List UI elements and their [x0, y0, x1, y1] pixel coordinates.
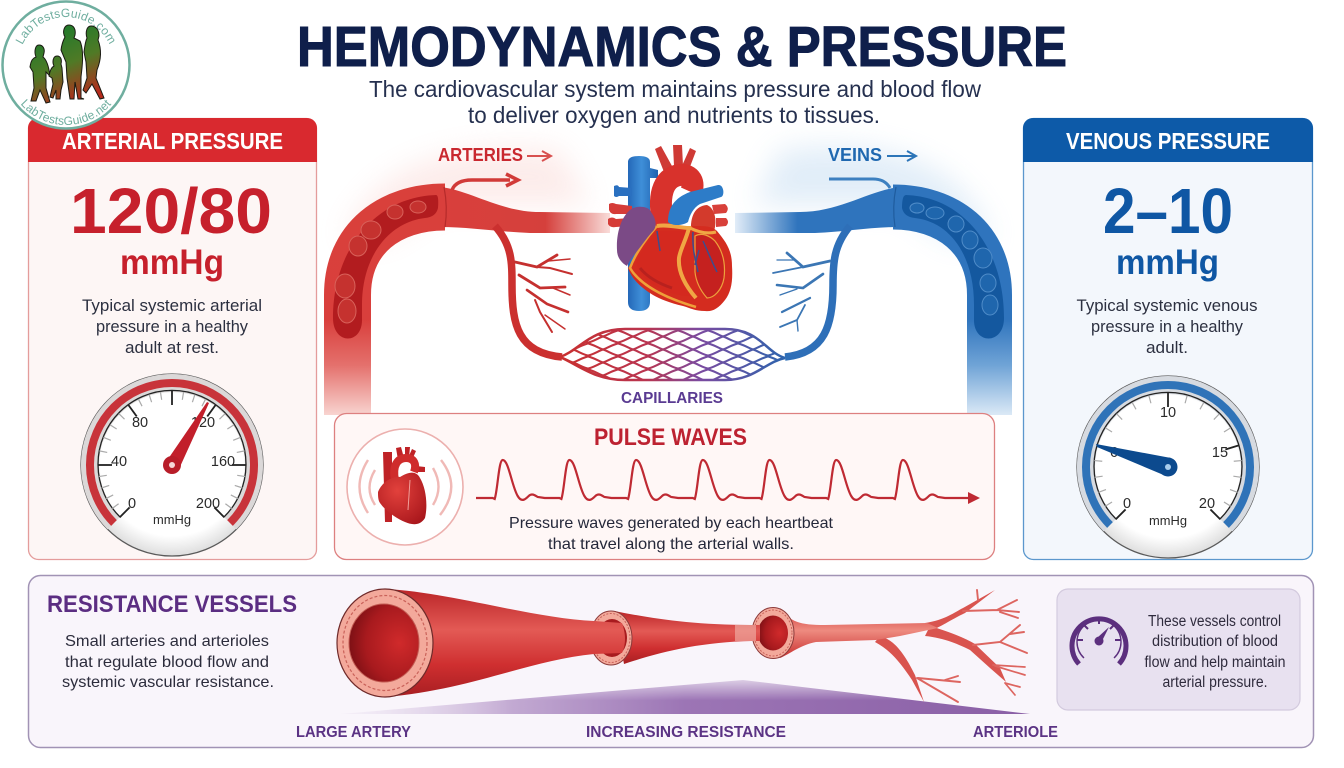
orange fat bands — [657, 225, 696, 298]
label: arteries: ARTERIES — [438, 145, 523, 165]
pulse description — [509, 515, 834, 553]
vein vessel — [735, 187, 1004, 415]
resistance description: that regulate blood flow and — [65, 654, 269, 671]
callout text: flow and help maintain — [1144, 654, 1286, 671]
aortic stubs — [655, 145, 696, 172]
subtitle: The cardiovascular system maintains pressure and blood flow — [369, 76, 981, 102]
artery lumen with blood cells — [333, 195, 438, 339]
venous description — [1076, 296, 1258, 357]
glow: venous side — [755, 147, 991, 240]
vein branch to capillaries — [785, 226, 850, 357]
panel: venous pressure — [1023, 118, 1313, 560]
diagram: circulation — [333, 145, 1004, 415]
pulmonary artery — [668, 185, 723, 225]
large ring — [337, 589, 433, 697]
chart: increasing resistance wedge — [340, 680, 1030, 714]
callout text: These vessels control — [1148, 613, 1281, 630]
label: increasing resistance: INCREASING RESISTANCE — [586, 724, 786, 741]
arteriole primary branches — [875, 590, 1006, 702]
arterial gauge: 120 — [191, 415, 215, 431]
venous gauge: 20 — [1199, 496, 1215, 512]
panel: arterial pressure — [28, 118, 317, 560]
arrow: arterial flow — [452, 174, 518, 190]
resistance description — [62, 633, 274, 691]
venous gauge — [1077, 376, 1259, 558]
arrow: venous flow — [829, 179, 890, 188]
callout text — [1144, 613, 1286, 691]
small ring — [752, 608, 794, 658]
arterial gauge: 200 — [196, 496, 220, 512]
right atrium — [617, 207, 656, 266]
arterial description — [82, 296, 262, 357]
resistance description: Small arteries and arterioles — [65, 633, 269, 650]
pulmonary veins — [608, 203, 632, 227]
icon: pulsing heart — [347, 429, 463, 545]
arterial gauge — [81, 374, 263, 556]
mini heart vessels — [383, 447, 425, 522]
vein lumen with blood cells — [902, 195, 1004, 339]
label: veins: VEINS — [828, 145, 882, 165]
venous header — [1023, 118, 1313, 162]
panel: pulse waves — [334, 414, 994, 560]
heading: resistance vessels: RESISTANCE VESSELS — [47, 591, 297, 618]
glow: arterial side — [345, 148, 590, 240]
venous gauge: 0 — [1123, 496, 1131, 512]
heading: pulse waves: PULSE WAVES — [594, 424, 747, 451]
icon: anatomical heart — [608, 145, 732, 311]
label: veins — [828, 145, 916, 165]
arteriole body — [780, 608, 938, 658]
arteriole twigs — [917, 590, 1027, 702]
logo text top: LabTestsGuide.com — [16, 8, 114, 44]
venous gauge: mmHg — [1149, 513, 1187, 528]
resistance description: systemic vascular resistance. — [62, 674, 274, 691]
right ventricle — [636, 231, 690, 296]
venous header label: VENOUS PRESSURE — [1066, 128, 1270, 154]
illustration: narrowing artery — [337, 589, 1027, 702]
arterial value: 120/80 — [70, 175, 272, 247]
panel: resistance vessels — [28, 576, 1314, 748]
venous value: 2–10 — [1103, 175, 1233, 247]
callout text: distribution of blood — [1152, 633, 1278, 650]
venous description: pressure in a healthy — [1091, 317, 1243, 336]
coronary vessels — [657, 231, 717, 272]
arterial description: adult at rest. — [125, 338, 219, 357]
pulse description: Pressure waves generated by each heartbeat — [509, 515, 834, 532]
venous gauge: 6 — [1110, 445, 1118, 461]
icon: purple gauge — [1072, 618, 1126, 664]
subtitle — [369, 76, 981, 128]
aortic arch — [661, 175, 693, 226]
left ventricle chamber — [695, 234, 725, 298]
title: HEMODYNAMICS & PRESSURE — [297, 15, 1067, 79]
heart body — [628, 226, 732, 311]
pulse description: that travel along the arterial walls. — [548, 536, 794, 553]
logo — [1, 0, 131, 130]
logo text bottom: LabTestsGuide.net — [21, 99, 112, 125]
callout text: arterial pressure. — [1162, 674, 1268, 691]
vein twigs — [773, 253, 830, 331]
arterial description: pressure in a healthy — [96, 317, 248, 336]
capillary network — [560, 329, 785, 380]
artery vessel — [333, 187, 610, 415]
arterial gauge: 40 — [111, 454, 127, 470]
subtitle: to deliver oxygen and nutrients to tissues. — [468, 102, 880, 128]
mini heart arch — [394, 458, 415, 480]
arterial gauge: mmHg — [153, 512, 191, 527]
venous gauge: 10 — [1160, 405, 1176, 421]
arterial gauge: 160 — [211, 454, 235, 470]
artery branch to capillaries — [495, 226, 562, 357]
arterial header label: ARTERIAL PRESSURE — [62, 128, 283, 154]
venous description: Typical systemic venous — [1076, 296, 1258, 315]
vena cava — [628, 156, 658, 311]
arterial unit: mmHg — [120, 243, 224, 282]
medium ring — [590, 611, 632, 665]
arterial gauge: 80 — [132, 415, 148, 431]
venous gauge: 15 — [1212, 445, 1228, 461]
label: arteriole: ARTERIOLE — [973, 724, 1058, 741]
logo family silhouette — [30, 25, 104, 103]
mini heart body — [378, 473, 426, 524]
left atrium — [691, 205, 715, 234]
arterial gauge: 0 — [128, 496, 136, 512]
venous description: adult. — [1146, 338, 1188, 357]
venous unit: mmHg — [1116, 243, 1219, 282]
mid artery body — [614, 611, 760, 664]
callout — [1057, 589, 1300, 710]
large artery body — [385, 589, 625, 697]
arterial header — [28, 118, 317, 162]
chart: pulse waveform — [476, 460, 980, 504]
artery twigs — [515, 255, 572, 332]
right stubs — [712, 204, 728, 227]
label: large artery: LARGE ARTERY — [296, 724, 411, 741]
arterial description: Typical systemic arterial — [82, 296, 262, 315]
label: capillaries: CAPILLARIES — [621, 390, 723, 407]
